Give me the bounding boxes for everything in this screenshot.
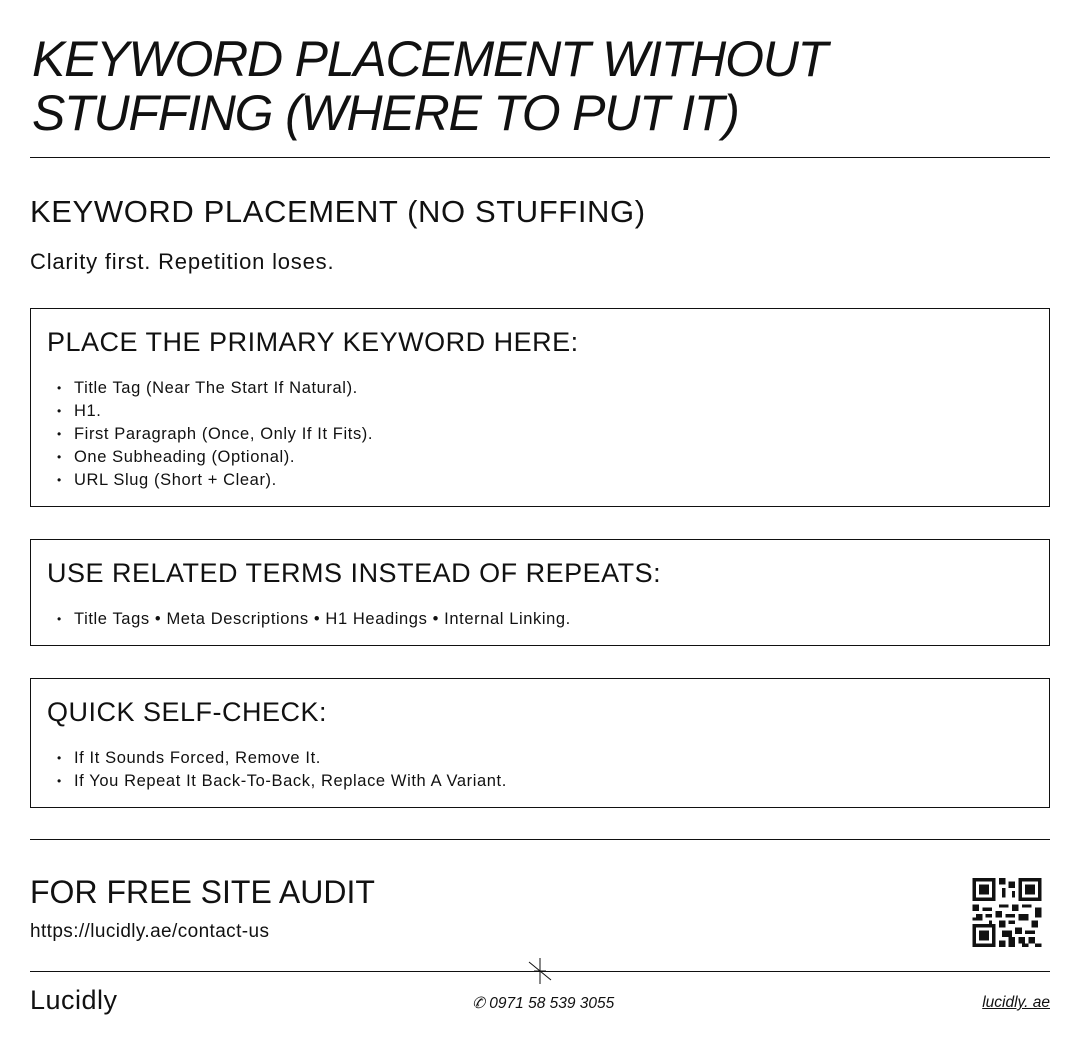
- bullet list: If You Repeat It Back-To-Back, Replace With A Variant.: [74, 772, 507, 790]
- bullet list: [58, 749, 507, 790]
- bullet list: [58, 379, 373, 489]
- bullet list: Title Tag (Near The Start If Natural).: [74, 379, 358, 397]
- CTA heading: FOR FREE SITE AUDIT: [30, 874, 375, 910]
- bullet list: URL Slug (Short + Clear).: [74, 471, 277, 489]
- panel heading: QUICK SELF-CHECK:: [47, 697, 327, 727]
- title: [32, 31, 832, 141]
- logo: Lucidly: [30, 985, 118, 1015]
- subheading: KEYWORD PLACEMENT (NO STUFFING): [30, 194, 646, 229]
- website link: lucidly. ae: [982, 994, 1050, 1011]
- icon: sparkle mark: [528, 958, 552, 984]
- bullet list: Title Tags • Meta Descriptions • H1 Headings • Internal Linking.: [74, 610, 571, 628]
- CTA url: https://lucidly.ae/contact-us: [30, 921, 269, 942]
- panel heading: USE RELATED TERMS INSTEAD OF REPEATS:: [47, 558, 661, 588]
- panel heading: PLACE THE PRIMARY KEYWORD HERE:: [47, 327, 579, 357]
- panel: primary keyword: [30, 308, 1050, 507]
- phone: ✆ 0971 58 539 3055: [472, 995, 614, 1012]
- bullet list: First Paragraph (Once, Only If It Fits).: [74, 425, 373, 443]
- panel: related terms: [30, 539, 1050, 646]
- icon: QR code: [972, 878, 1042, 947]
- bullet list: If It Sounds Forced, Remove It.: [74, 749, 321, 767]
- panel: self-check: [30, 678, 1050, 808]
- bullet list: One Subheading (Optional).: [74, 448, 295, 466]
- bullet list: H1.: [74, 402, 101, 420]
- title: STUFFING (WHERE TO PUT IT): [32, 85, 739, 141]
- tagline: Clarity first. Repetition loses.: [30, 249, 334, 274]
- title: KEYWORD PLACEMENT WITHOUT: [32, 31, 827, 87]
